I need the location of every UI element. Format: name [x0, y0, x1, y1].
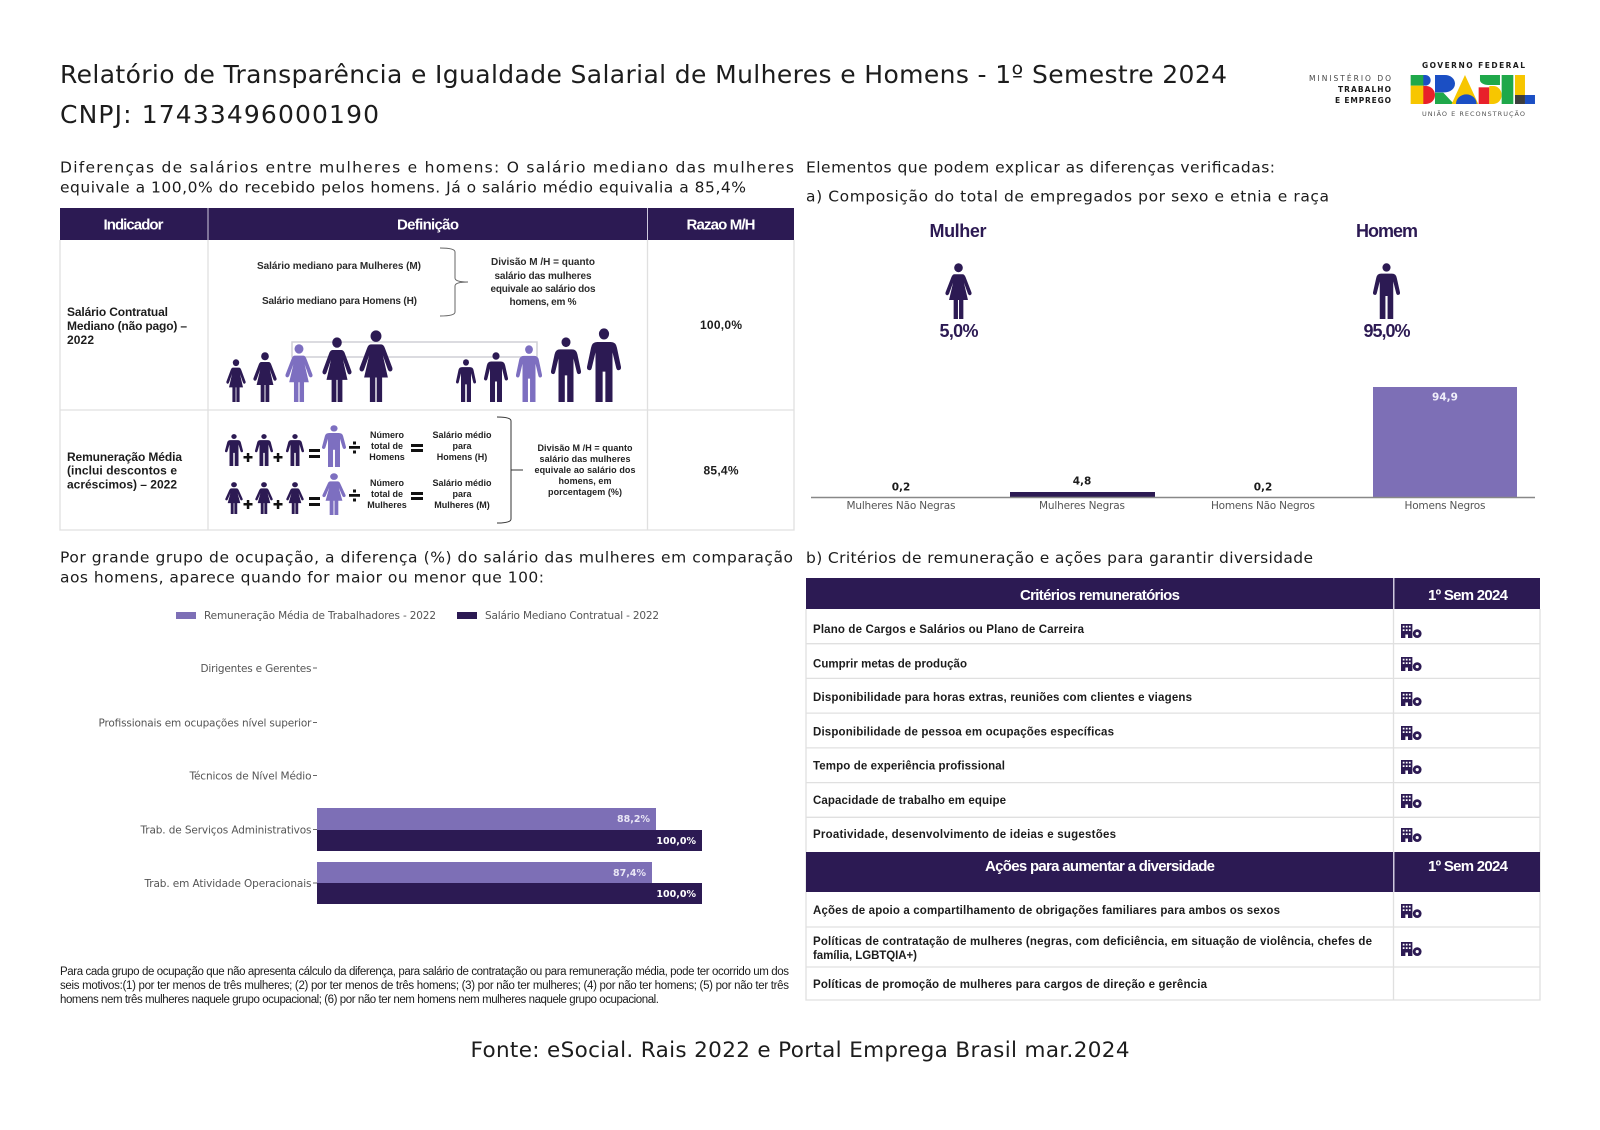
chart legend	[176, 610, 659, 622]
average men equation: Homens	[369, 452, 405, 462]
chart legend: Salário Mediano Contratual - 2022	[485, 610, 659, 622]
panel: women share	[930, 221, 986, 341]
row label: remuneração média: Remuneração Média	[67, 450, 182, 464]
bar chart: occupation groups	[98, 610, 702, 904]
value: average ratio: 85,4%	[704, 464, 739, 478]
average division note with bracket: Divisão M /H = quanto	[538, 443, 633, 453]
average women equation: Salário médio	[432, 478, 492, 488]
category labels: Trab. em Atividade Operacionais	[144, 878, 312, 890]
bars: serviços administrativos: 100,0%	[656, 836, 696, 847]
column chart: composition by sex and race: Mulheres Negras	[1039, 500, 1125, 512]
panel: men share: Homem	[1356, 221, 1418, 241]
criteria header	[806, 578, 1540, 609]
average women equation: total de	[371, 489, 403, 499]
row: plano de cargos: Plano de Cargos e Salários ou Plano de Carreira	[813, 624, 1085, 636]
bars: atividade operacionais: 100,0%	[656, 889, 696, 900]
title: CNPJ: 17433496000190	[60, 100, 379, 129]
logo: ministério do trabalho e emprego, governo federal: GOVERNO FEDERAL	[1422, 61, 1525, 70]
average division note with bracket: equivale ao salário dos	[534, 465, 636, 475]
category labels: Trab. de Serviços Administrativos	[140, 824, 312, 836]
text block: occupation intro: Por grande grupo de ocupação, a diferença (%) do salário das mulheres em comparação	[60, 548, 793, 566]
category labels: Dirigentes e Gerentes	[200, 663, 312, 675]
table header row	[60, 208, 794, 240]
row: metas de produção: Cumprir metas de produção	[813, 658, 967, 670]
subheading: remuneration criteria: b) Critérios de remuneração e ações para garantir diversidade	[806, 549, 1313, 567]
median definition labels: salário das mulheres	[494, 271, 592, 282]
column chart: composition by sex and race: Homens Negros	[1404, 500, 1486, 512]
panel: women share: 5,0%	[940, 321, 978, 341]
value: median ratio: 100,0%	[700, 318, 742, 332]
median people pictogram	[226, 328, 621, 402]
column chart: composition by sex and race: 94,9	[1432, 392, 1458, 404]
logo: ministério do trabalho e emprego, governo federal: TRABALHO	[1338, 85, 1391, 94]
source line: Fonte: eSocial. Rais 2022 e Portal Emprega Brasil mar.2024	[470, 1038, 1130, 1063]
footnote	[60, 966, 789, 1006]
diversity actions header: Ações para aumentar a diversidade	[985, 858, 1215, 875]
category labels: Técnicos de Nível Médio	[188, 770, 312, 782]
table header row: Definição	[397, 216, 459, 234]
row label: salário contratual mediano: 2022	[67, 333, 94, 347]
text block: occupation intro	[60, 548, 793, 586]
footnote: seis motivos:(1) por ter menos de três mulheres; (2) por ter menos de três homens; (3) por não ter mulheres; (4) por não ter homens; (5) por não ter três	[60, 980, 789, 992]
average women equation: Mulheres (M)	[434, 500, 490, 510]
median definition labels: Salário mediano para Homens (H)	[262, 296, 417, 307]
average women equation: Mulheres	[367, 500, 407, 510]
row label: remuneração média	[67, 450, 182, 492]
criteria header: 1º Sem 2024	[1428, 587, 1509, 604]
row label: salário contratual mediano	[67, 305, 187, 347]
footnote: homens nem três mulheres naquele grupo ocupacional; (6) por não ter nem homens nem mulheres naquele grupo ocupacional.	[60, 994, 659, 1006]
column chart: composition by sex and race: 0,2	[892, 482, 910, 494]
average division note with bracket: homens, em	[558, 476, 612, 486]
category labels: Profissionais em ocupações nível superior	[98, 718, 312, 730]
bars: serviços administrativos: 88,2%	[617, 814, 650, 825]
median definition labels: Divisão M /H = quanto	[491, 257, 595, 268]
text block: wage differences intro: Diferenças de salários entre mulheres e homens: O salário mediano das mulheres	[60, 158, 794, 176]
criteria header: Critérios remuneratórios	[1020, 587, 1180, 604]
row: metas de produção	[813, 657, 1422, 671]
average division note with bracket: porcentagem (%)	[548, 487, 622, 497]
bars: serviços administrativos	[317, 808, 702, 851]
column chart: composition by sex and race: 4,8	[1073, 476, 1091, 488]
panel: indicator table	[60, 208, 794, 530]
title	[60, 60, 1227, 129]
row: obrigações familiares: Ações de apoio a compartilhamento de obrigações familiares para ambos os sexos	[813, 905, 1280, 917]
average women equation	[225, 473, 492, 515]
row: horas extras	[813, 692, 1422, 706]
row: obrigações familiares	[813, 904, 1422, 918]
median definition labels: Salário mediano para Mulheres (M)	[257, 261, 421, 272]
row: políticas de promoção: Políticas de promoção de mulheres para cargos de direção e gerência	[813, 979, 1208, 991]
logo: ministério do trabalho e emprego, governo federal	[1309, 61, 1535, 118]
panel: men share: 95,0%	[1364, 321, 1410, 341]
text block: wage differences intro	[60, 158, 794, 196]
median definition labels: equivale ao salário dos	[490, 284, 596, 295]
bars: atividade operacionais: 87,4%	[613, 868, 646, 879]
text block: explaining elements heading: Elementos que podem explicar as diferenças verificadas:	[806, 158, 1275, 176]
column chart: composition by sex and race	[811, 387, 1535, 512]
median definition labels	[257, 248, 596, 316]
average men equation: Homens (H)	[437, 452, 487, 462]
logo: ministério do trabalho e emprego, governo federal: E EMPREGO	[1335, 96, 1391, 105]
average men equation: para	[452, 441, 472, 451]
row: políticas de contratação	[813, 936, 1422, 962]
average men equation: Número	[370, 430, 404, 440]
panel: criteria table	[806, 578, 1540, 1000]
text block: occupation intro: aos homens, aparece quando for maior ou menor que 100:	[60, 568, 544, 586]
panel: men share	[1356, 221, 1418, 341]
row label: remuneração média: (inclui descontos e	[67, 464, 177, 478]
text block: explaining elements heading	[806, 158, 1329, 206]
median definition labels: homens, em %	[510, 297, 577, 308]
chart legend: Remuneração Média de Trabalhadores - 2022	[204, 610, 436, 622]
diversity actions header	[806, 852, 1540, 892]
row: tempo de experiência	[813, 760, 1422, 774]
average men equation: total de	[371, 441, 403, 451]
bars: atividade operacionais	[317, 862, 702, 904]
row: proatividade	[813, 828, 1422, 842]
title: Relatório de Transparência e Igualdade Salarial de Mulheres e Homens - 1º Semestre 2024	[60, 60, 1227, 89]
row: tempo de experiência: Tempo de experiência profissional	[813, 760, 1005, 772]
logo: ministério do trabalho e emprego, governo federal: UNIÃO E RECONSTRUÇÃO	[1422, 109, 1525, 118]
row: horas extras: Disponibilidade para horas extras, reuniões com clientes e viagens	[813, 692, 1192, 704]
table header row: Razao M/H	[686, 216, 756, 234]
row: políticas de contratação: Políticas de contratação de mulheres (negras, com deficiência, em situação de violência, chefes de	[813, 936, 1372, 948]
row: políticas de contratação: família, LGBTQIA+)	[813, 950, 917, 962]
row: ocupações específicas: Disponibilidade de pessoa em ocupações específicas	[813, 726, 1114, 738]
text block: explaining elements heading: a) Composição do total de empregados por sexo e etnia e raça	[806, 188, 1329, 206]
row label: salário contratual mediano: Mediano (não pago) –	[67, 319, 187, 333]
average division note with bracket	[497, 417, 636, 523]
average women equation: Número	[370, 478, 404, 488]
average men equation: Salário médio	[432, 430, 492, 440]
diversity actions header: 1º Sem 2024	[1428, 858, 1509, 875]
text block: wage differences intro: equivale a 100,0% do recebido pelos homens. Já o salário médio equivalia a 85,4%	[60, 178, 746, 196]
row: ocupações específicas	[813, 726, 1422, 740]
column chart: composition by sex and race: Homens Não Negros	[1211, 500, 1315, 512]
category labels	[98, 663, 317, 890]
row: proatividade: Proatividade, desenvolvimento de ideias e sugestões	[813, 829, 1116, 841]
footnote: Para cada grupo de ocupação que não apresenta cálculo da diferença, para salário de contratação ou para remuneração média, pode ter ocorrido um dos	[60, 966, 789, 978]
row: trabalho em equipe	[813, 794, 1422, 808]
average division note with bracket: salário das mulheres	[540, 454, 630, 464]
row label: salário contratual mediano: Salário Contratual	[67, 305, 168, 319]
average men equation	[225, 425, 492, 467]
average women equation: para	[452, 489, 472, 499]
table header row: Indicador	[104, 216, 164, 234]
row label: remuneração média: acréscimos) – 2022	[67, 478, 177, 492]
row: trabalho em equipe: Capacidade de trabalho em equipe	[813, 795, 1006, 807]
panel: women share: Mulher	[930, 221, 986, 241]
column chart: composition by sex and race: Mulheres Não Negras	[846, 500, 956, 512]
row: plano de cargos	[813, 624, 1422, 638]
column chart: composition by sex and race: 0,2	[1254, 482, 1272, 494]
logo: ministério do trabalho e emprego, governo federal: MINISTÉRIO DO	[1309, 74, 1391, 83]
